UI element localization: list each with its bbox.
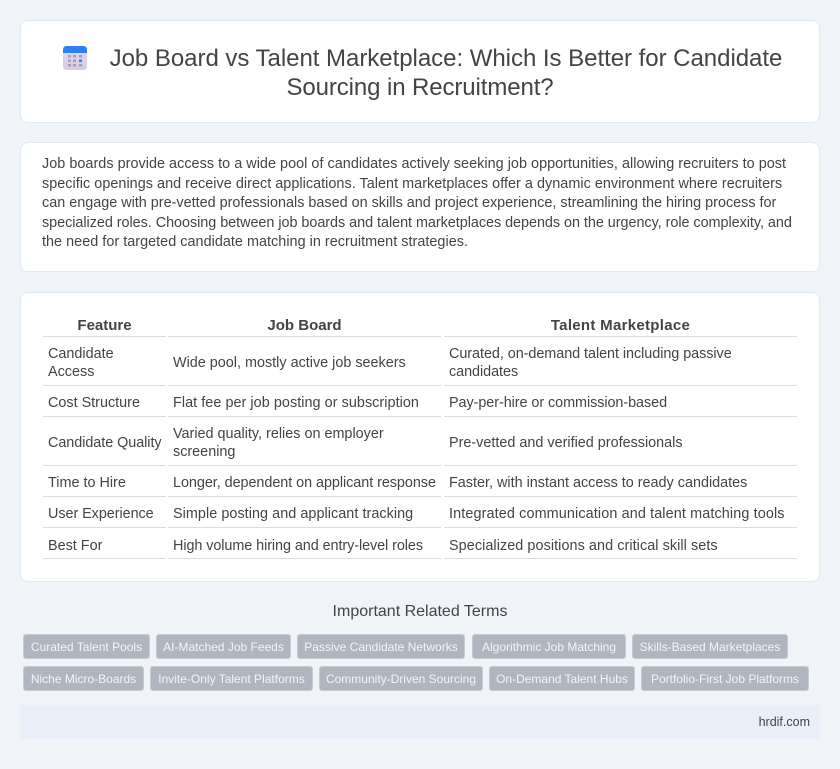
footer source text: hrdif.com xyxy=(759,715,810,729)
tags: related terms: Community-Driven Sourcing xyxy=(326,672,476,686)
text block: summary: the need for targeted candidate matching in recruitment strategies. xyxy=(42,234,468,250)
tags: related terms: Portfolio-First Job Platforms xyxy=(651,672,799,686)
comparison table: Flat fee per job posting or subscription xyxy=(173,395,419,411)
comparison table: User Experience xyxy=(48,506,154,522)
comparison table: Simple posting and applicant tracking xyxy=(173,506,413,522)
comparison table: Cost Structure xyxy=(48,395,140,411)
heading: important related terms: Important Related Terms xyxy=(333,603,507,620)
tags: related terms: On-Demand Talent Hubs xyxy=(496,672,628,686)
footer xyxy=(20,705,820,739)
comparison table: Curated, on-demand talent including passive xyxy=(449,346,732,362)
comparison table: Pre-vetted and verified professionals xyxy=(449,435,683,451)
text block: summary: can engage with pre-vetted professionals based on skills and project experience, streamlining the hiring process for xyxy=(42,195,776,211)
tags: related terms: AI-Matched Job Feeds xyxy=(163,640,284,654)
comparison table: Wide pool, mostly active job seekers xyxy=(173,355,406,371)
tags: related terms: Niche Micro-Boards xyxy=(31,672,136,686)
text block: summary: Job boards provide access to a wide pool of candidates actively seeking job opportunities, allowing recruiters to post xyxy=(42,156,786,172)
comparison table: Specialized positions and critical skill sets xyxy=(449,538,718,554)
text block: summary xyxy=(42,156,792,250)
comparison table: Faster, with instant access to ready candidates xyxy=(449,475,747,491)
panel: summary text xyxy=(20,142,820,272)
comparison table: Integrated communication and talent matching tools xyxy=(449,506,785,522)
comparison table: Candidate Quality xyxy=(48,435,162,451)
icon: calendar xyxy=(63,46,87,70)
comparison table: candidates xyxy=(449,364,518,380)
tags: related terms xyxy=(23,634,809,691)
comparison table: Varied quality, relies on employer xyxy=(173,426,384,442)
comparison table: Feature xyxy=(77,317,132,334)
title: Sourcing in Recruitment? xyxy=(286,74,554,101)
comparison table: Job Board xyxy=(267,317,342,334)
tags: related terms: Skills-Based Marketplaces xyxy=(640,640,780,654)
comparison table: Longer, dependent on applicant response xyxy=(173,475,436,491)
comparison table: Pay-per-hire or commission-based xyxy=(449,395,667,411)
tags: related terms: Algorithmic Job Matching xyxy=(482,640,616,654)
comparison table: Candidate xyxy=(48,346,114,362)
text block: summary: specialized roles. Choosing between job boards and talent marketplaces depends on the urgency, role complexity, and xyxy=(42,214,792,230)
title xyxy=(110,45,782,101)
tags: related terms: Invite-Only Talent Platforms xyxy=(158,672,305,686)
title: Job Board vs Talent Marketplace: Which Is Better for Candidate xyxy=(110,45,782,72)
panel: title card xyxy=(20,20,820,123)
tags: related terms: Passive Candidate Networks xyxy=(304,640,458,654)
comparison table: Time to Hire xyxy=(48,475,126,491)
comparison table: Best For xyxy=(48,538,102,554)
tags: related terms: Curated Talent Pools xyxy=(31,640,142,654)
comparison table: High volume hiring and entry-level roles xyxy=(173,538,423,554)
comparison table: Access xyxy=(48,364,94,380)
comparison table: screening xyxy=(173,444,235,460)
comparison table: Talent Marketplace xyxy=(551,317,690,334)
comparison table xyxy=(43,317,797,559)
panel: comparison table xyxy=(20,292,820,582)
text block: summary: specific openings and receive direct applications. Talent marketplaces offer a dynamic environment where recruiters xyxy=(42,176,782,192)
